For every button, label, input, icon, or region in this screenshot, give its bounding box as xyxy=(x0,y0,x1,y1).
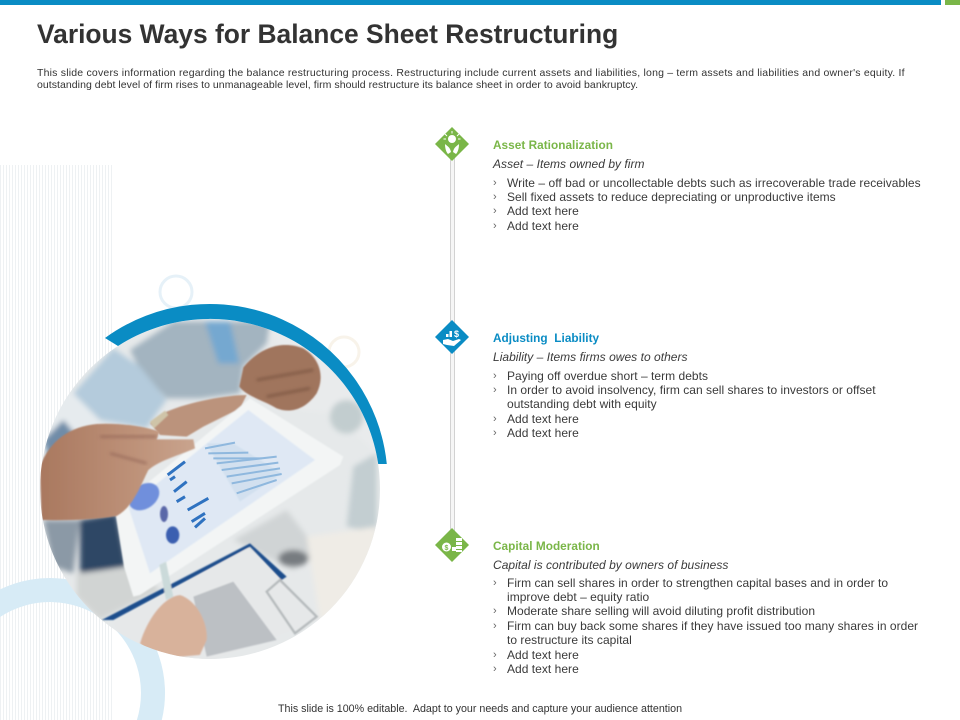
section: Adjusting Liability: Add text here xyxy=(507,426,579,440)
arc: blue crescent xyxy=(105,304,387,464)
section: Asset Rationalization xyxy=(492,138,921,233)
section: Adjusting Liability: Liability – Items firms owes to others xyxy=(493,350,688,364)
title: Various Ways for Balance Sheet Restructuring xyxy=(37,19,618,49)
section: Capital Moderation: Firm can buy back some shares if they have issued too many shares in order xyxy=(507,619,918,633)
section: Capital Moderation: › xyxy=(493,649,497,661)
section: Capital Moderation: Add text here xyxy=(507,648,579,662)
footer note: This slide is 100% editable. Adapt to your needs and capture your audience attention xyxy=(278,703,682,715)
section: Adjusting Liability: Adjusting Liability xyxy=(493,331,599,345)
section: Asset Rationalization: › xyxy=(493,177,497,189)
section: Asset Rationalization: Sell fixed assets to reduce depreciating or unproductive items xyxy=(507,190,836,204)
section: Asset Rationalization: Asset Rationalization xyxy=(493,138,613,152)
section: Asset Rationalization: Add text here xyxy=(507,204,579,218)
section: Capital Moderation: Capital Moderation xyxy=(493,539,600,553)
section: Capital Moderation xyxy=(493,539,918,676)
section: Asset Rationalization: › xyxy=(493,191,497,203)
intro text xyxy=(37,67,905,91)
section: Capital Moderation: Moderate share selling will avoid diluting profit distribution xyxy=(507,604,815,618)
section: Capital Moderation: › xyxy=(493,663,497,675)
section: Capital Moderation: improve debt – equity ratio xyxy=(507,590,649,604)
section: Capital Moderation: Add text here xyxy=(507,662,579,676)
section: Adjusting Liability: › xyxy=(493,384,497,396)
intro text: This slide covers information regarding the balance restructuring process. Restructuring include current assets and liabilities, long – term assets and liabilities and owner's equity. If xyxy=(37,67,905,79)
photo: hands with tablet at a meeting xyxy=(40,319,380,660)
section: Adjusting Liability: In order to avoid insolvency, firm can sell shares to investors or offset xyxy=(507,383,876,397)
icon: green diamond with coins: $ xyxy=(444,545,448,552)
section: Adjusting Liability xyxy=(493,331,876,440)
section: Adjusting Liability: outstanding debt with equity xyxy=(507,397,657,411)
ring: small pale cream xyxy=(329,337,359,367)
icon: blue diamond with chart and hand: $ xyxy=(454,329,459,339)
icon: green diamond with lightbulb and hand xyxy=(435,127,469,161)
section: Asset Rationalization: Add text here xyxy=(507,219,579,233)
section: Adjusting Liability: › xyxy=(493,427,497,439)
intro text: outstanding debt level of firm rises to unmanageable level, firm should restructure its balance sheet in order to avoid bankruptcy. xyxy=(37,79,638,91)
ring: large pale blue xyxy=(0,578,165,720)
section: Adjusting Liability: › xyxy=(493,413,497,425)
section: Capital Moderation: to restructure its capital xyxy=(507,633,632,647)
section: Adjusting Liability: Paying off overdue short – term debts xyxy=(507,369,708,383)
section: Asset Rationalization: › xyxy=(493,205,497,217)
section: Capital Moderation: › xyxy=(493,605,497,617)
section: Capital Moderation: Capital is contributed by owners of business xyxy=(493,558,728,572)
section: Capital Moderation: Firm can sell shares in order to strengthen capital bases and in order to xyxy=(507,576,888,590)
section: Asset Rationalization: Asset – Items owned by firm xyxy=(493,157,645,171)
section: Adjusting Liability: Add text here xyxy=(507,412,579,426)
section: Capital Moderation: › xyxy=(493,620,497,632)
section: Adjusting Liability: › xyxy=(493,370,497,382)
section: Asset Rationalization: Write – off bad or uncollectable debts such as irrecoverable trade receivables xyxy=(507,176,921,190)
section: Asset Rationalization: › xyxy=(493,220,497,232)
timeline vertical line xyxy=(450,158,455,534)
top accent bar xyxy=(0,0,960,5)
decorative photo illustration with rings and arc xyxy=(0,165,387,720)
icon: blue diamond with chart and hand xyxy=(435,320,469,354)
section: Capital Moderation: › xyxy=(493,577,497,589)
icon: green diamond with coins xyxy=(435,528,469,562)
ring: small pale blue xyxy=(160,276,192,308)
